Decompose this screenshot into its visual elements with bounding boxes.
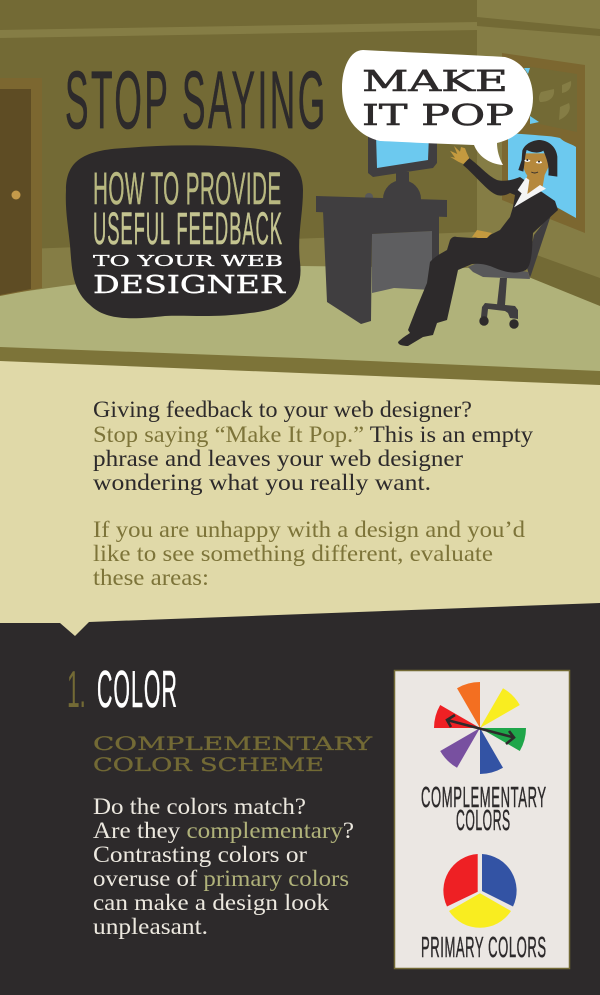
callout: subtitle badge: DESIGNER: [93, 271, 286, 299]
text block: intro paragraph: Giving feedback to your web designer?: [93, 397, 472, 422]
text block: color questions: [93, 794, 354, 939]
label: complementary colors: COLORS: [456, 804, 510, 837]
text block: color questions: Do the colors match?: [93, 794, 306, 819]
neck and face: [522, 153, 549, 195]
panel: color wheels: [394, 670, 570, 968]
callout: subtitle badge: USEFUL FEEDBACK: [93, 205, 282, 254]
hair: [518, 140, 557, 177]
label: complementary colors: COMPLEMENTARY: [421, 781, 546, 813]
label: complementary colors: [421, 781, 546, 837]
chart: primary color wheel: [443, 854, 517, 928]
subheading: complementary color scheme: COMPLEMENTARY: [93, 733, 373, 755]
text block: evaluation prompt: like to see something different, evaluate: [93, 541, 493, 566]
text block: color questions: unpleasant.: [93, 914, 208, 939]
callout: make it pop speech bubble: [342, 50, 533, 165]
icon: monitor: [365, 130, 437, 218]
head and collar: [514, 140, 557, 207]
text block: evaluation prompt: If you are unhappy with a design and you’d: [93, 517, 526, 542]
text block: color questions: overuse of primary colors: [93, 866, 349, 891]
text block: intro paragraph: phrase and leaves your web designer: [93, 446, 463, 471]
callout: subtitle badge: TO YOUR WEB: [93, 252, 283, 270]
callout: subtitle badge: [66, 145, 303, 318]
raised hand: [450, 146, 469, 164]
text block: intro paragraph: Stop saying “Make It Pop.” This is an empty: [93, 422, 534, 447]
subheading: complementary color scheme: [93, 733, 373, 776]
icon: door: [0, 78, 42, 296]
hand on lap: [472, 230, 492, 238]
icon: desk: [316, 196, 447, 324]
text block: intro paragraph: [93, 397, 534, 495]
panel: intro section: [0, 361, 600, 636]
callout: make it pop speech bubble: IT POP: [362, 98, 514, 132]
heading: section number: 1.: [67, 660, 86, 719]
icon: woman in office chair: [398, 140, 558, 346]
shirt collar: [514, 178, 546, 207]
subheading: complementary color scheme: COLOR SCHEME: [93, 754, 324, 776]
chair: [468, 212, 552, 329]
eyes and mouth: [524, 159, 542, 173]
callout: make it pop speech bubble: MAKE: [362, 64, 508, 98]
title: stop saying: STOP SAYING: [65, 55, 325, 146]
callout: subtitle badge: HOW TO PROVIDE: [93, 164, 281, 214]
body in black suit: [398, 158, 558, 346]
panel: office scene background: [0, 0, 600, 385]
text block: color questions: can make a design look: [93, 890, 330, 915]
arrow: complementary pairing: [447, 715, 514, 744]
text block: evaluation prompt: these areas:: [93, 565, 209, 590]
text block: color questions: Contrasting colors or: [93, 842, 307, 867]
heading: color: COLOR: [97, 661, 177, 719]
label: primary colors: PRIMARY COLORS: [421, 931, 546, 963]
icon: window: [502, 53, 585, 233]
chart: complementary color wheel: [434, 682, 526, 774]
text block: intro paragraph: wondering what you really want.: [93, 470, 431, 495]
text block: color questions: Are they complementary ?: [93, 818, 354, 843]
text block: evaluation prompt: [93, 517, 526, 590]
